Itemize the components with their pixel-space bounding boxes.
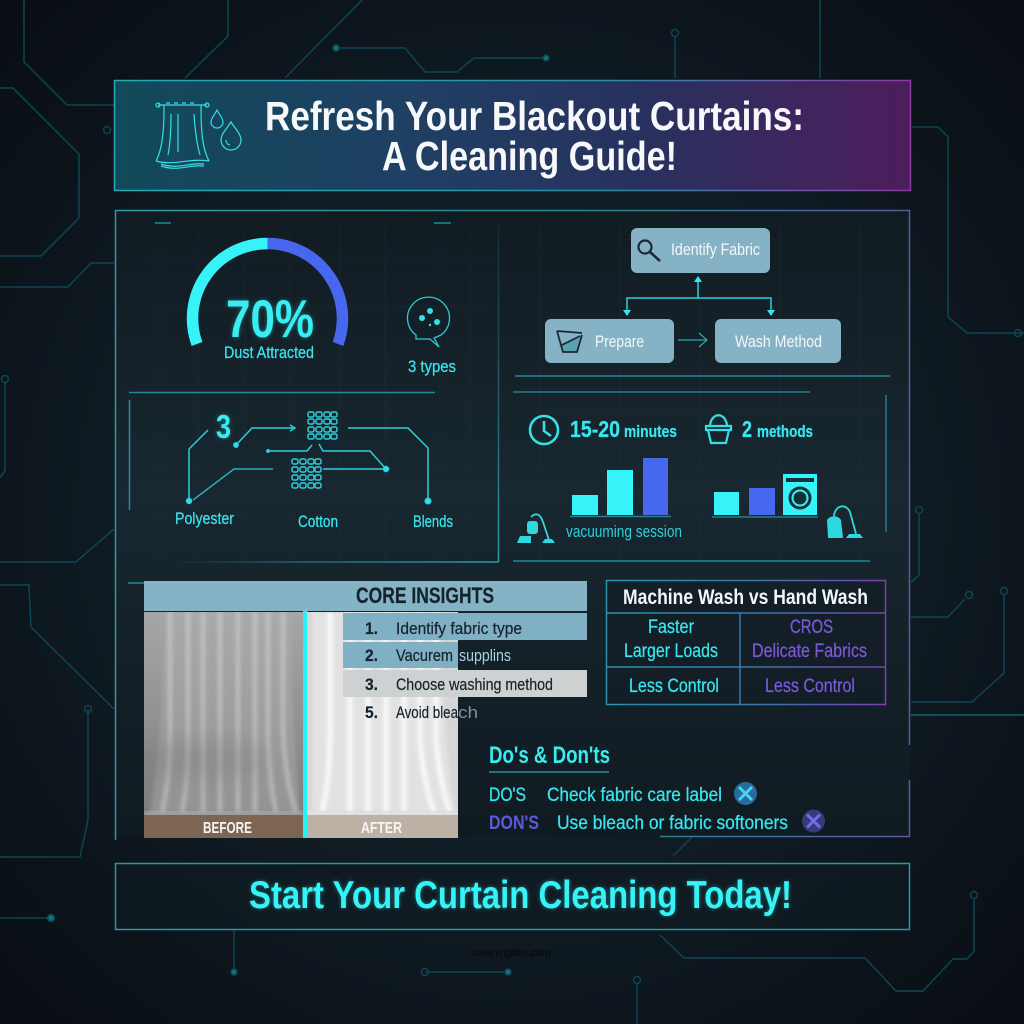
insight 2: Vacurem — [396, 646, 453, 665]
insight 3 — [343, 670, 587, 697]
fabric labels — [175, 509, 453, 531]
insight 1: 1. — [365, 619, 378, 638]
gauge label: Dust Attracted — [224, 343, 314, 362]
step: identify fabric — [631, 228, 770, 273]
gauge value: 70% — [226, 290, 314, 349]
stat: 2 methods — [742, 416, 813, 442]
icon: curtain with water drops — [156, 103, 241, 168]
insight 5 — [365, 703, 478, 722]
bar chart: two methods with washing machine — [712, 474, 818, 517]
fabric labels: Blends — [413, 512, 453, 531]
step: identify fabric: Identify Fabric — [671, 240, 760, 259]
core insights header: CORE INSIGHTS — [356, 583, 494, 608]
hand wash column: CROS — [790, 617, 833, 638]
icon: fabric swatch lower — [292, 459, 321, 488]
after label: AFTER — [361, 820, 402, 837]
machine wash column: Faster — [648, 617, 695, 638]
before and after photo — [130, 611, 458, 838]
insight 3: Choose washing method — [396, 675, 553, 694]
do's and don'ts — [489, 742, 825, 834]
machine wash column — [624, 617, 719, 697]
don't row — [489, 810, 825, 834]
fabric labels: Polyester — [175, 509, 234, 528]
connector lines — [186, 425, 431, 504]
stat: 15-20 minutes: 15-20 — [570, 416, 620, 442]
title: Refresh Your Blackout Curtains: — [265, 93, 804, 139]
icon: vacuum right — [827, 506, 863, 538]
time and methods stats — [530, 415, 813, 444]
stat: 2 methods: methods — [757, 422, 813, 441]
fabric labels: Cotton — [298, 512, 338, 531]
after curtain photo — [307, 612, 458, 838]
table title: Machine Wash vs Hand Wash — [623, 586, 868, 609]
title — [265, 93, 804, 179]
bar chart: vacuuming session — [566, 458, 682, 541]
insight 3: 3. — [365, 675, 378, 694]
insight 2 — [343, 642, 511, 668]
insight 1 — [343, 613, 587, 640]
icon: dust bubble, 3 types — [408, 297, 456, 376]
hand wash column: Less Control — [765, 676, 855, 697]
don't row: Use bleach or fabric softoners — [557, 813, 788, 834]
header banner — [114, 80, 910, 190]
flow arrows — [623, 276, 775, 347]
stat: 2 methods: 2 — [742, 416, 752, 442]
icon: vacuum left — [517, 514, 555, 543]
main panel — [115, 210, 910, 840]
do row: DO'S — [489, 785, 526, 806]
icon: washing machine — [783, 474, 817, 515]
step: wash method: Wash Method — [735, 332, 822, 351]
step: wash method — [715, 319, 841, 363]
icon: basket — [706, 415, 731, 443]
source credit: cleaningbro.com — [472, 947, 551, 959]
icon: fabric swatch upper — [308, 412, 337, 439]
do row — [489, 782, 757, 806]
insight 5: 5. — [365, 703, 378, 722]
title: A Cleaning Guide! — [382, 133, 677, 179]
heading: Do's & Don'ts — [489, 742, 610, 769]
core insights header — [144, 581, 587, 611]
don't row: DON'S — [489, 813, 539, 834]
call to action — [116, 864, 910, 930]
do row: Check fabric care label — [547, 785, 722, 806]
icon: clock — [530, 416, 558, 444]
stat: 15-20 minutes — [570, 416, 677, 442]
count 3: 3 — [216, 408, 231, 445]
insight 2: supplins — [459, 646, 511, 665]
hand wash column: Delicate Fabrics — [752, 641, 867, 662]
machine wash column: Less Control — [629, 676, 719, 697]
step: prepare: Prepare — [595, 332, 644, 351]
bar chart: vacuuming session: vacuuming session — [566, 522, 682, 541]
fabric types diagram — [129, 225, 498, 562]
machine wash column: Larger Loads — [624, 641, 718, 662]
insight 1: Identify fabric type — [396, 619, 522, 638]
icon: dust bubble, 3 types: 3 types — [408, 357, 456, 376]
call to action: Start Your Curtain Cleaning Today! — [249, 874, 792, 917]
hand wash column — [752, 617, 867, 697]
gauge: 70% dust attracted — [193, 244, 342, 362]
insight 5: ch — [458, 703, 478, 722]
comparison table — [606, 580, 886, 704]
before curtain photo — [130, 612, 303, 838]
process flowchart — [545, 228, 841, 363]
insight 2: 2. — [365, 646, 378, 665]
step: prepare — [545, 319, 674, 363]
before label: BEFORE — [203, 820, 252, 837]
stat: 15-20 minutes: minutes — [624, 422, 677, 441]
insight 5: Avoid blea — [396, 703, 458, 722]
divider — [303, 611, 308, 838]
core insights — [144, 581, 587, 722]
